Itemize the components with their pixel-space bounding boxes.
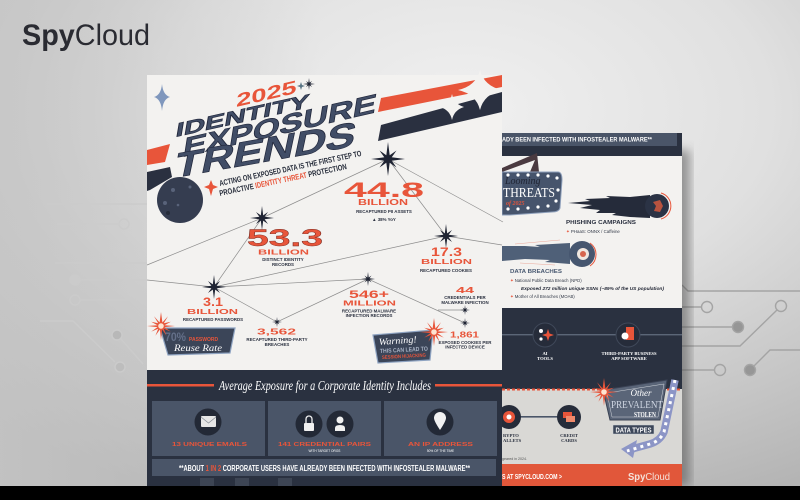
icons: crypto wallets and credit cards: geared in 2024. [502,457,527,461]
label: data breaches: Exposed 272 million unique SSNs (~89% of the US population) [521,286,665,291]
arrow: marquee [621,380,675,458]
stat: 44: CREDENTIALS PER [444,295,487,300]
stat: 546+ million: MILLION [343,298,396,308]
stat: 17.3 billion: 17.3 [431,247,462,259]
footer: S AT SPYCLOUD.COM > [502,472,562,481]
sign: other prevalent stolen data types: Other [630,388,652,398]
row: AI and third-party icons: THIRD-PARTY BUSINESS [601,351,657,356]
icon: orange star [204,180,218,196]
banner continuation: ADY BEEN INFECTED WITH INFOSTEALER MALWARE** [502,136,652,144]
stat: 53.3 billion: BILLION [258,248,309,256]
stat: 3,562: 3,562 [257,326,296,336]
sign: other prevalent stolen data types [603,380,667,434]
stat: 1,861: EXPOSED COOKIES PER [439,340,492,345]
heading: 2025: 2025 [236,76,297,111]
callout: warning: Warning! [379,335,417,348]
label: phishing campaigns: PHISHING CAMPAIGNS [566,220,637,226]
icon: burst right [420,318,448,346]
icon: burst [590,378,618,406]
stat: 3.1 billion: BILLION [187,307,238,316]
callout: warning [373,330,433,363]
card: emails: 13 UNIQUE EMAILS [172,442,247,448]
icons: crypto wallets and credit cards: ALLETS [503,438,522,443]
logo: SpyCloud: SpyCloud [22,19,150,52]
stat: 44: MALWARE INFECTION [441,300,489,305]
callout: warning: THIS CAN LEAD TO [380,346,428,355]
banner continuation [502,133,677,146]
stat: 17.3 billion [420,247,472,273]
stat: 1,861: 1,861 [450,330,479,340]
constellation lines [147,159,503,323]
stat: 1,861: INFECTED DEVICE [445,344,485,350]
icon: blue star [154,84,170,111]
card: emails [152,401,265,456]
callout: warning: SESSION HIJACKING [382,353,426,361]
bottom bar [0,486,800,500]
card: IP address: AN IP ADDRESS [408,442,473,448]
stat: 44.8 billion: BILLION [358,197,408,207]
title: TRENDS [171,115,360,186]
sign: looming threats: of 2025 [506,201,524,207]
sign: other prevalent stolen data types: DATA TYPES [616,428,652,434]
stat: 546+ million: INFECTION RECORDS [346,313,392,318]
icons: small title stars [297,78,315,90]
tagline: PROACTIVE IDENTITY THREAT PROTECTION [219,162,348,198]
icons: crypto wallets and credit cards: RYPTO [503,433,519,438]
card: IP address: 50% OF THE TIME [427,449,454,453]
stat: 53.3 billion: DISTINCT IDENTITY [262,257,304,262]
callout: 70% password reuse rate: PASSWORD [189,337,218,343]
title: IDENTITY [174,91,311,142]
stat: 546+ million: RECAPTURED MALWARE [342,308,396,314]
callout: 70% password reuse rate [160,328,235,355]
stat: 44 [441,285,489,305]
card: IP address [384,401,497,456]
page shadow [670,150,690,486]
label: data breaches: ✦ Mother of All Breaches (MOAB) [510,294,575,299]
icon: burst left [147,312,175,340]
comet: phishing [568,193,671,219]
stripes [147,70,502,191]
tagline: ACTING ON EXPOSED DATA IS THE FIRST STEP TO [219,149,362,188]
row: AI and third-party icons: TOOLS [537,356,553,361]
stat: 44: 44 [456,285,474,295]
card: credential pairs: WITH TARGET ORGS [309,449,340,453]
heading: average exposure: Average Exposure for a Corporate Identity Includes [218,379,431,394]
label: phishing campaigns: ✦ PHaaS: ONNX / Caffeine [566,229,620,234]
stat: 44.8 billion: 44.8 [344,179,425,202]
stat: 3,562 [246,326,308,347]
banner: 1 in 2 [152,459,496,476]
callout: 70% password reuse rate: 70% [165,330,186,344]
stat: 1,861 [439,330,492,350]
panel: front page [147,70,503,486]
lower light section [502,389,682,464]
sign: looming threats: THREATS [503,186,555,201]
card: credential pairs [268,401,381,456]
stat: 3.1 billion: RECAPTURED PASSWORDS [183,317,243,322]
stars [202,142,470,328]
faint figures below banner [200,478,292,486]
row: AI and third-party icons: APP SOFTWARE [611,356,647,361]
label: data breaches [510,269,665,299]
stat: 17.3 billion: RECAPTURED COOKIES [420,268,472,273]
sign: other prevalent stolen data types: STOLEN [634,411,656,419]
row: AI and third-party icons [502,323,682,361]
label: data breaches: ✦ National Public Data Breach (NPD) [510,278,582,283]
banner: 1 in 2: **ABOUT 1 IN 2 CORPORATE USERS HAVE ALREADY BEEN INFECTED WITH INFOSTEALER MALWARE** [179,464,471,473]
stat: 53.3 billion: RECORDS [272,262,294,267]
stat: 3,562: RECAPTURED THIRD-PARTY [246,337,308,342]
stat: 44.8 billion: ▲ 38% YoY [372,217,396,222]
stat: 3.1 billion [183,297,243,322]
footer [502,464,682,486]
circuit lines left [40,204,147,372]
sign: other prevalent stolen data types: PREVALENT [611,400,663,411]
stat: 3.1 billion: 3.1 [203,297,224,309]
label: phishing campaigns [566,220,637,234]
stat: 53.3 billion: 53.3 [247,225,323,252]
stat: 546+ million: 546+ [349,289,389,301]
stat: 44.8 billion [344,179,425,222]
stat: 53.3 billion [247,225,323,267]
icons: crypto wallets and credit cards: CARDS [561,438,577,443]
row: AI and third-party icons: AI [542,351,548,356]
icons: crypto wallets and credit cards [497,405,581,461]
panel: back page [497,133,682,486]
icon: planet [157,177,203,223]
stat: 546+ million [342,289,396,318]
title [171,88,379,186]
sign: looming threats [502,153,562,215]
label: data breaches: DATA BREACHES [510,269,563,275]
card: credential pairs: 141 CREDENTIAL PAIRS [278,442,371,448]
stat: 17.3 billion: BILLION [421,257,472,266]
dark section [147,370,502,486]
circuit lines right [682,285,800,376]
footer: SpyCloud [628,471,670,483]
comet: data breaches [502,240,596,267]
icons: crypto wallets and credit cards: CREDIT [560,433,578,438]
stat: 3,562: BREACHES [265,342,289,347]
stat: 44.8 billion: RECAPTURED PII ASSETS [356,209,412,214]
callout: 70% password reuse rate: Reuse Rate [173,343,222,353]
title: EXPOSURE [181,88,379,163]
sign: looming threats: Looming [504,176,541,187]
